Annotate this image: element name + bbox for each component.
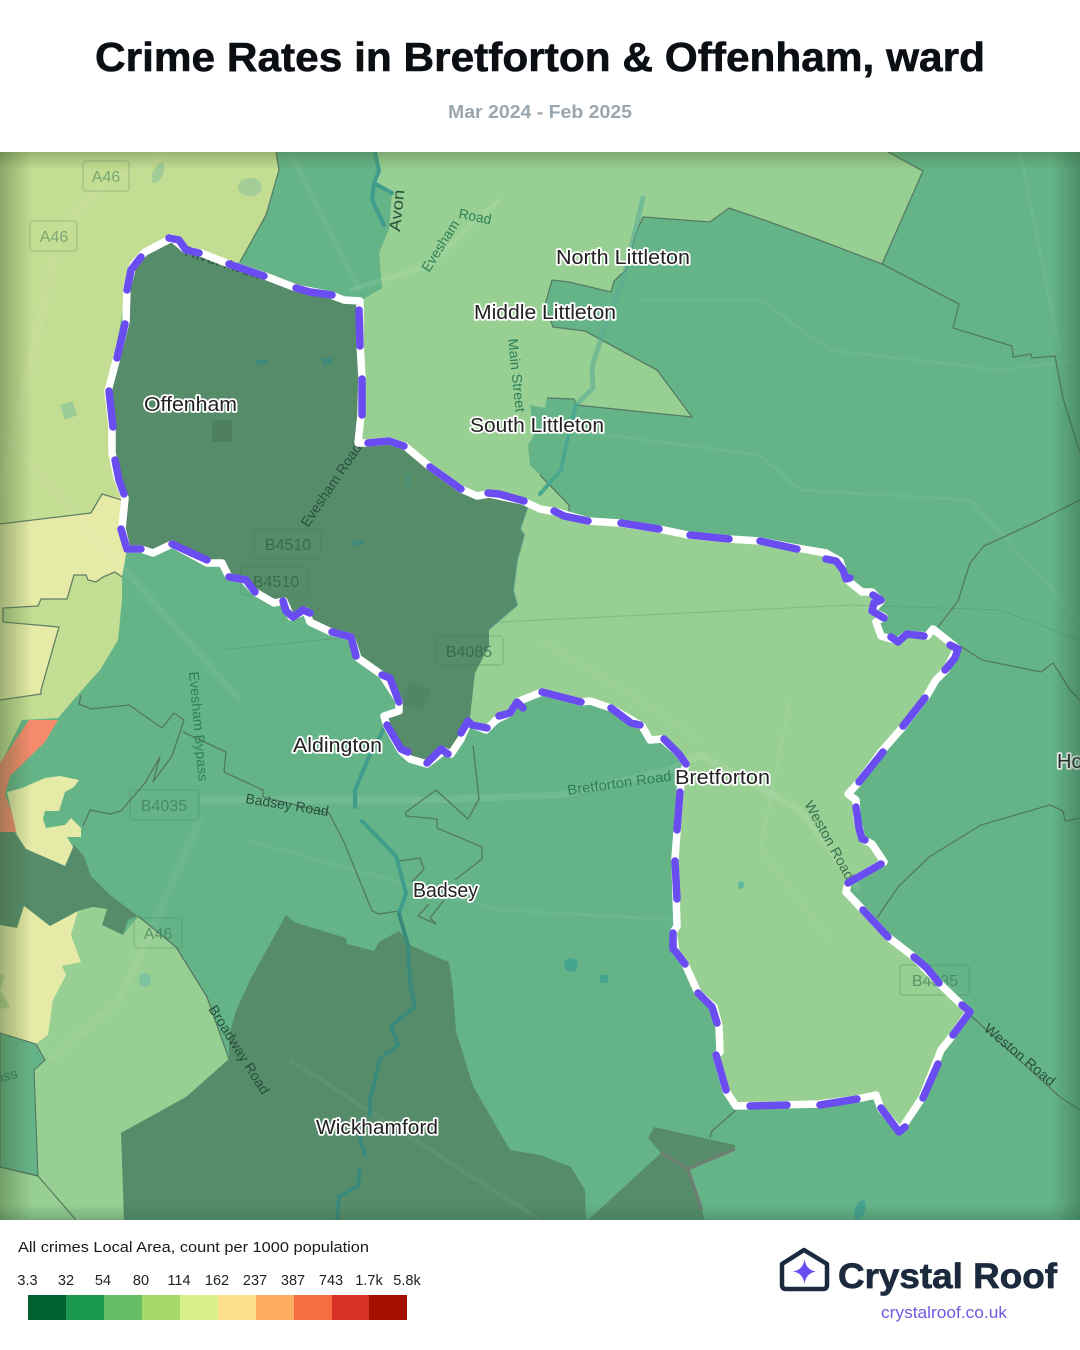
area: ward Offenham dark green xyxy=(108,238,527,764)
place labels: Middle Littleton xyxy=(474,302,616,324)
area: light green Littletons xyxy=(358,152,923,513)
road labels: Weston Road xyxy=(801,798,858,882)
place labels xyxy=(144,247,1080,1139)
area: pale yellow west xyxy=(0,494,127,700)
website url: crystalroof.co.uk xyxy=(881,1304,1008,1322)
map edge vignette xyxy=(0,152,1080,1220)
area: yellow-green north-west xyxy=(0,152,279,524)
road shields: A46 xyxy=(40,229,68,246)
area: dark green west xyxy=(0,832,138,935)
road labels: Evesham Road xyxy=(297,440,365,530)
road labels: Road xyxy=(457,205,493,227)
road labels: Avon xyxy=(387,189,408,232)
legend scale values: 54 xyxy=(95,1273,111,1289)
road labels: Weston Road xyxy=(981,1020,1059,1089)
area: small yellow-green sliver xyxy=(0,973,10,1009)
legend scale values: 162 xyxy=(205,1273,229,1289)
area boundary lines xyxy=(0,152,1080,1220)
icon: house with star xyxy=(782,1250,827,1289)
ponds and fields xyxy=(60,161,868,1221)
area: dark green south-east xyxy=(588,1127,735,1220)
road labels: Badsey Road xyxy=(245,790,330,819)
area: mid-green south-west patch xyxy=(0,1033,45,1176)
road shields xyxy=(30,161,969,995)
legend title: All crimes Local Area, count per 1000 population xyxy=(18,1239,369,1256)
legend scale values: 32 xyxy=(58,1273,74,1289)
road shields: B4510 xyxy=(253,574,299,591)
title: Crime Rates in Bretforton & Offenham, ward xyxy=(95,34,985,80)
road shields: B4035 xyxy=(912,973,958,990)
logo: Crystal Roof xyxy=(782,1250,1057,1322)
legend scale values xyxy=(17,1273,421,1289)
legend xyxy=(17,1239,421,1320)
place labels: North Littleton xyxy=(556,247,690,269)
area: pale yellow south-west xyxy=(0,906,81,1044)
legend scale values: 237 xyxy=(243,1273,267,1289)
road shields: A46 xyxy=(92,169,120,186)
road labels: River Avon xyxy=(183,243,262,282)
subtitle: date range: Mar 2024 - Feb 2025 xyxy=(448,102,632,122)
rivers xyxy=(337,152,643,1220)
road labels: Broadway Road xyxy=(205,1002,273,1097)
road shields: B4035 xyxy=(141,798,187,815)
legend scale values: 743 xyxy=(319,1273,343,1289)
road labels: Evesham Bypass xyxy=(186,671,212,782)
faint roads and field lines xyxy=(200,198,862,892)
wordmark: Crystal Roof xyxy=(838,1257,1057,1296)
place labels: South Littleton xyxy=(470,415,604,437)
area: dark green Wickhamford xyxy=(121,915,586,1220)
legend scale values: 3.3 xyxy=(17,1273,38,1289)
area: ward Bretforton light green xyxy=(461,501,969,1131)
road labels xyxy=(0,189,1059,1097)
road labels: Bretforton Road xyxy=(566,768,672,798)
area: pale yellow patch xyxy=(7,776,81,866)
legend scale values: 80 xyxy=(133,1273,149,1289)
area: yellow-green west xyxy=(0,572,122,765)
thin line: east-west track xyxy=(220,605,1080,650)
road labels: Evesham xyxy=(418,217,462,275)
road shields: B4510 xyxy=(265,537,311,554)
place labels: Offenham xyxy=(144,394,237,416)
place labels: Wickhamford xyxy=(316,1117,438,1139)
road labels: Main Street xyxy=(505,338,529,413)
legend scale values: 1.7k xyxy=(355,1273,383,1289)
ward boundary: white casing and purple dashes xyxy=(108,238,970,1132)
place labels: Aldington xyxy=(293,735,382,757)
map panel xyxy=(0,152,1080,1221)
place labels: Bretforton xyxy=(675,767,770,789)
legend scale values: 387 xyxy=(281,1273,305,1289)
place labels: Badsey xyxy=(413,880,478,902)
legend scale values: 5.8k xyxy=(393,1273,421,1289)
area: light green south-west xyxy=(0,907,229,1220)
area: orange high-crime patch xyxy=(0,720,58,833)
legend scale values: 114 xyxy=(167,1273,191,1289)
road shields: B4085 xyxy=(446,644,492,661)
map base: mid-green crime band xyxy=(0,152,1080,1220)
road shields: A46 xyxy=(144,926,172,943)
legend colour bar xyxy=(28,1295,407,1320)
